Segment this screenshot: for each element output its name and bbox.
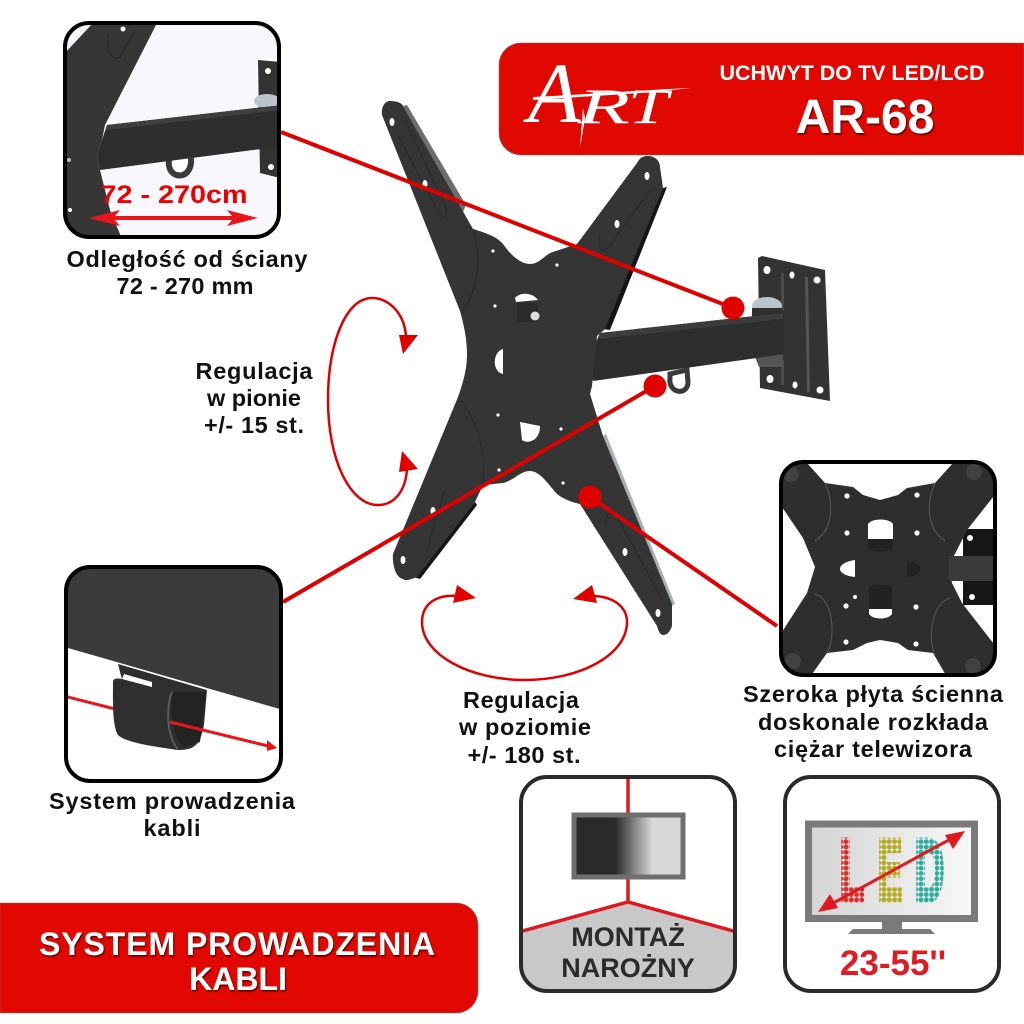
- main product: TV wall mount: [382, 101, 830, 635]
- label: cable system: [49, 788, 296, 841]
- label: vertical adjustment: Regulacja: [196, 358, 313, 384]
- distance arrow: [89, 210, 258, 226]
- footer banner: [0, 903, 478, 1013]
- LED text: [840, 823, 944, 919]
- swivel ball: [752, 297, 782, 315]
- plate holes: [390, 118, 660, 617]
- label: horizontal adjustment: w poziomie: [458, 714, 591, 740]
- footer banner: SYSTEM PROWADZENIA: [39, 926, 435, 962]
- support arm: [588, 313, 785, 381]
- LED text: E: [878, 823, 902, 919]
- footer banner: KABLI: [189, 961, 287, 997]
- cable clip on arm: [670, 370, 688, 391]
- icon: corner mounting: [519, 775, 737, 993]
- logo: ART: A: [523, 45, 581, 141]
- header banner: [499, 43, 1024, 155]
- diagonal arrow: [818, 831, 965, 912]
- panel: wide wall plate inset: [779, 460, 997, 677]
- icon: LED TV size: [785, 777, 999, 991]
- X-shaped plate: [382, 101, 672, 635]
- logo: ART: R: [576, 78, 630, 134]
- plate cutouts: [515, 294, 538, 302]
- icon: corner mounting: NAROŻNY: [561, 953, 695, 983]
- label: vertical adjustment: +/- 15 st.: [204, 412, 304, 438]
- label: horizontal adjustment: +/- 180 st.: [468, 742, 580, 768]
- connector lines and dots: [281, 132, 777, 626]
- panel: wall distance inset: [63, 21, 282, 239]
- icon: LED TV size: D: [915, 823, 944, 919]
- label: horizontal adjustment: Regulacja: [463, 687, 580, 713]
- screen size: 23-55'': [840, 944, 946, 983]
- label: wall distance: Odległość od ściany: [66, 246, 308, 272]
- header subtitle: UCHWYT DO TV LED/LCD: [720, 61, 984, 85]
- arrow: horizontal rotation: [422, 585, 627, 680]
- label: vertical adjustment: [196, 358, 313, 438]
- logo: ART: T: [628, 78, 673, 134]
- label: wide plate: [743, 681, 1004, 762]
- label: wide plate: Szeroka płyta ścienna: [743, 681, 1004, 707]
- mounting plate lips: [603, 187, 667, 330]
- logo: ART: [523, 45, 692, 148]
- label: cable system: kabli: [144, 815, 200, 841]
- label: wall distance: [66, 246, 308, 299]
- label: wide plate: ciężar telewizora: [774, 736, 973, 762]
- distance value: 72 - 270cm: [100, 181, 248, 209]
- arrow: vertical rotation: [328, 298, 418, 505]
- panel: cable clip inset: [64, 565, 283, 783]
- label: wall distance: 72 - 270 mm: [116, 273, 254, 299]
- label: horizontal adjustment: [458, 687, 591, 768]
- slots and lobes: [398, 120, 662, 600]
- label: wide plate: doskonale rozkłada: [758, 709, 989, 735]
- label: vertical adjustment: w pionie: [206, 385, 301, 411]
- label: cable system: System prowadzenia: [49, 788, 296, 814]
- LED text: L: [840, 823, 864, 919]
- icon text: MONTAŻ: [571, 922, 685, 952]
- wall plate: [758, 256, 830, 401]
- header model name: AR-68: [796, 91, 934, 144]
- TV monitor: [808, 824, 974, 918]
